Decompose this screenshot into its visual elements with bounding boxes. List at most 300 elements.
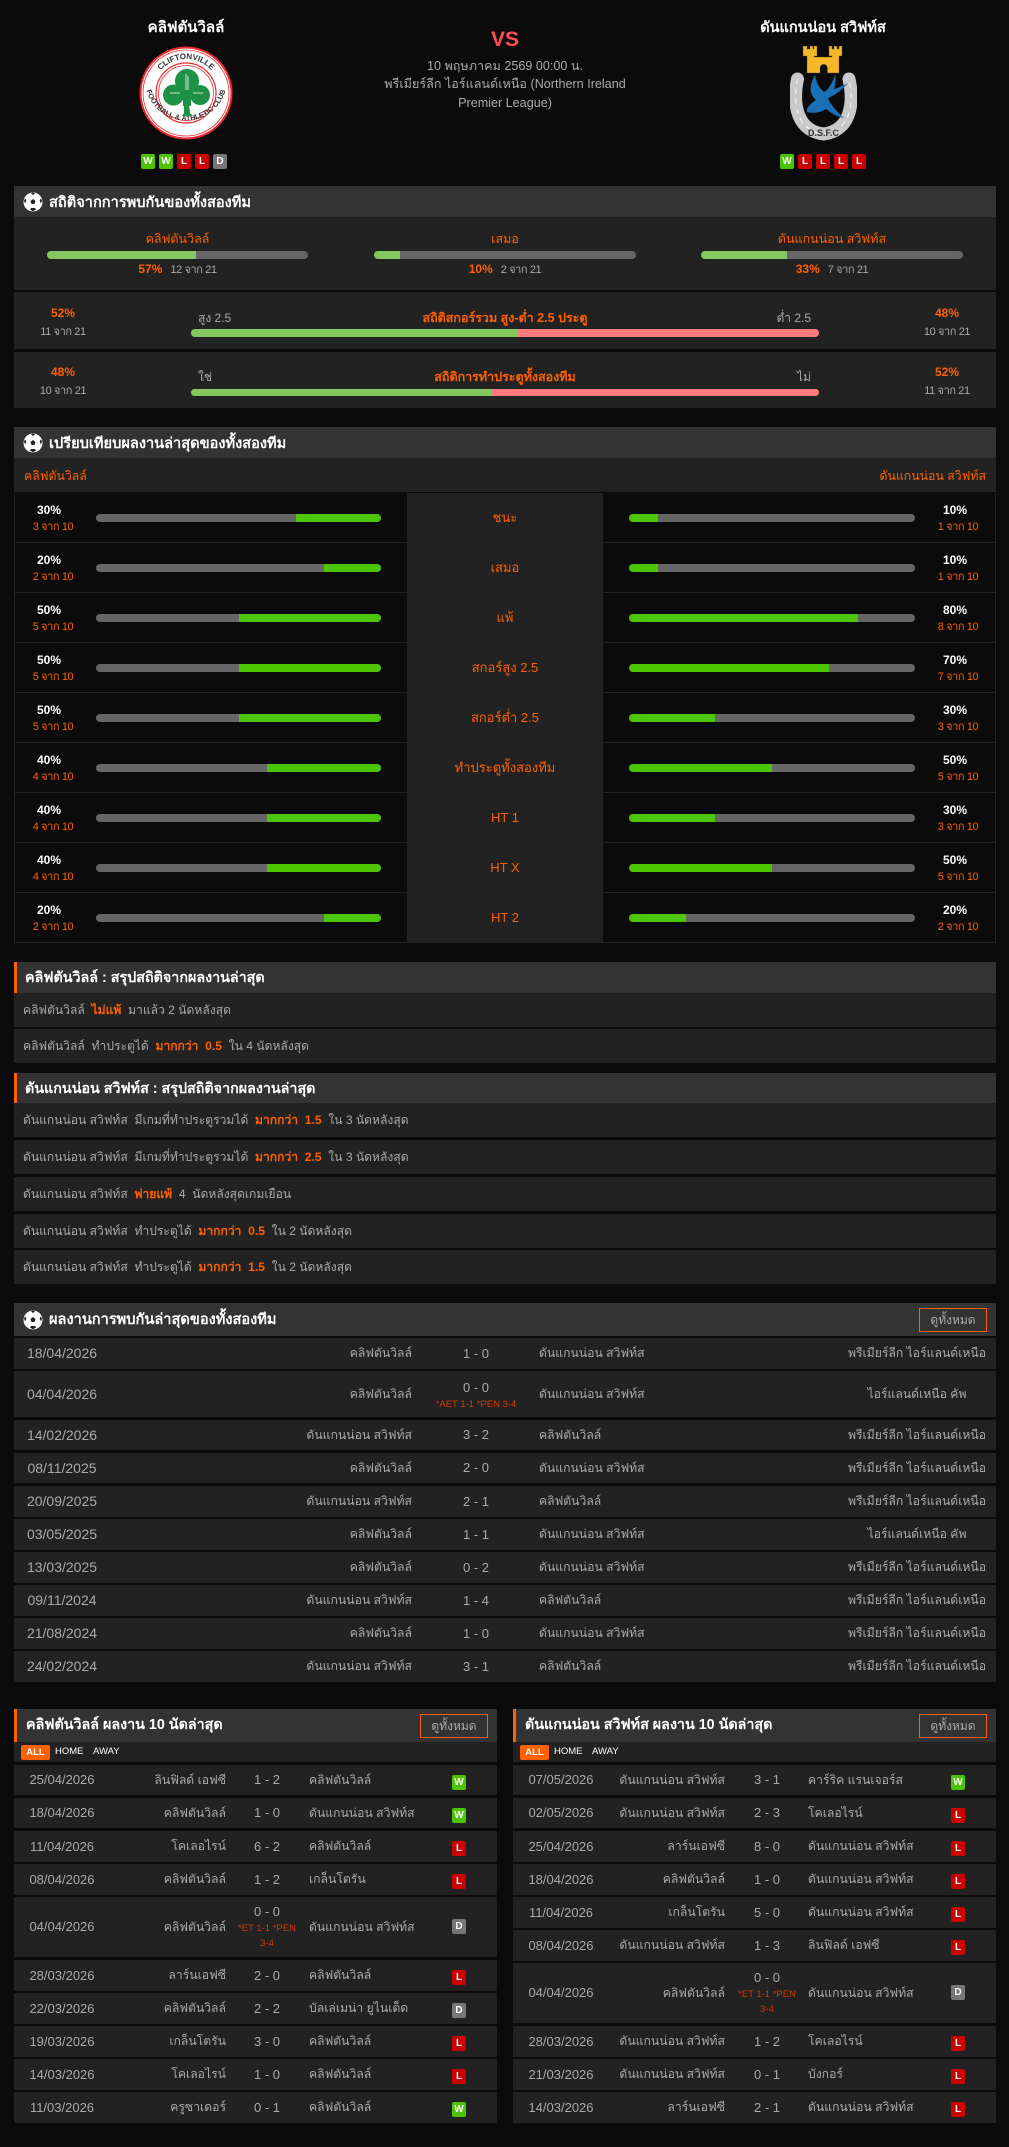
match row — [513, 1930, 996, 1961]
away team logo: Dungannon Swifts crest: D.S.F.C — [808, 128, 839, 138]
match row with penalties: คลิฟตันวิลล์ — [164, 1920, 226, 1934]
match row: คลิฟตันวิลล์ — [350, 1626, 412, 1640]
match row: 09/11/2024 — [27, 1592, 97, 1608]
chart title: สถิติสกอร์รวม สูง-ต่ำ 2.5 ประตู — [422, 311, 588, 325]
row: draws: 1 จาก 10 — [938, 571, 978, 583]
summary line — [14, 1214, 996, 1248]
match row: 0 - 1 — [754, 2067, 780, 2082]
label: over: สูง 2.5 — [198, 311, 231, 325]
match row: ดันแกนน่อน สวิฟท์ส — [619, 2034, 725, 2048]
match row: 1 - 2 — [254, 1872, 280, 1887]
home team label: คลิฟตันวิลล์ — [24, 469, 87, 483]
stat: away wins: 33% 7 จาก 21 — [796, 262, 868, 276]
match row: 25/04/2026 — [29, 1772, 95, 1787]
match row: L — [955, 1909, 961, 1920]
away form badges: L — [856, 156, 862, 167]
split bar — [191, 329, 819, 337]
match row: พรีเมียร์ลีก ไอร์แลนด์เหนือ — [848, 1659, 986, 1673]
row: both teams score: 50% — [943, 753, 967, 767]
match row: L — [955, 1942, 961, 1953]
match row: L — [955, 1810, 961, 1821]
match row: ไอร์แลนด์เหนือ คัพ — [868, 1527, 966, 1541]
match row: 1 - 0 — [254, 1805, 280, 1820]
match row: 1 - 1 — [463, 1527, 489, 1542]
heading: recent form comparison: เปรียบเทียบผลงานล่าสุดของทั้งสองทีม — [49, 436, 286, 452]
match row: 25/04/2026 — [528, 1839, 594, 1854]
match row: 8 - 0 — [754, 1839, 780, 1854]
row: losses: 80% — [943, 603, 967, 617]
match row: L — [955, 2071, 961, 2082]
home form badges: W — [161, 156, 171, 167]
panel: head to head win draw split — [14, 217, 996, 290]
home form badges: L — [181, 156, 187, 167]
match header — [140, 18, 886, 169]
match row: ดันแกนน่อน สวิฟท์ส — [539, 1387, 645, 1401]
team name strip — [14, 458, 996, 492]
row: draws — [14, 543, 996, 593]
match row: คลิฟตันวิลล์ — [539, 1593, 601, 1607]
match row: L — [456, 1843, 462, 1854]
match row: ดันแกนน่อน สวิฟท์ส — [306, 1593, 412, 1607]
match row: พรีเมียร์ลีก ไอร์แลนด์เหนือ — [848, 1346, 986, 1360]
match row: คลิฟตันวิลล์ — [309, 2100, 371, 2114]
match row — [14, 1371, 996, 1417]
stat: away wins: ดันแกนน่อน สวิฟท์ส — [778, 232, 886, 246]
row: both teams score: 40% — [37, 753, 61, 767]
match row with penalties: ดันแกนน่อน สวิฟท์ส — [808, 1986, 914, 2000]
row: wins: ชนะ — [493, 510, 517, 525]
row: HT 2: 20% — [37, 903, 61, 917]
home form badges — [141, 154, 227, 169]
match row — [513, 1831, 996, 1862]
match row: ดันแกนน่อน สวิฟท์ส — [306, 1494, 412, 1508]
match row: ดันแกนน่อน สวิฟท์ส — [808, 1872, 914, 1886]
home form badges: W — [143, 156, 153, 167]
row: HT X: 50% — [943, 853, 967, 867]
match row — [513, 1864, 996, 1895]
match row: 0 - 0 — [463, 1380, 489, 1395]
match row: 04/04/2026 — [27, 1386, 97, 1402]
summary line: คลิฟตันวิลล์ ไม่แพ้ มาแล้ว 2 นัดหลังสุด — [23, 1003, 231, 1017]
stat: home wins: 57% 12 จาก 21 — [138, 262, 217, 276]
match row with penalties: 3-4 — [760, 2004, 774, 2015]
match row: ดันแกนน่อน สวิฟท์ส — [619, 1773, 725, 1787]
row: over 2.5: สกอร์สูง 2.5 — [472, 660, 538, 675]
match row: บัลเล่เมน่า ยูไนเต็ด — [309, 2001, 408, 2015]
match row: 03/05/2025 — [27, 1526, 97, 1542]
away form badges: W — [782, 156, 792, 167]
match row: 13/03/2025 — [27, 1559, 97, 1575]
match row: 20/09/2025 — [27, 1493, 97, 1509]
row: wins: 10% — [943, 503, 967, 517]
match row: 22/03/2026 — [29, 2001, 95, 2016]
match row — [14, 1960, 497, 1991]
match row with penalties: 0 - 0 — [254, 1904, 280, 1919]
match row: คลิฟตันวิลล์ — [350, 1387, 412, 1401]
row: under 2.5: 5 จาก 10 — [33, 721, 73, 733]
button: view all: ดูทั้งหมด — [930, 1313, 976, 1327]
row: both teams score — [14, 743, 996, 793]
match row: W — [454, 1777, 464, 1788]
match row: ลาร์นเอฟซี — [667, 1839, 725, 1853]
match row — [14, 2059, 497, 2090]
filter tabs: ALL — [525, 1747, 544, 1758]
row: HT X: 40% — [37, 853, 61, 867]
button: view all: ดูทั้งหมด — [431, 1719, 477, 1733]
label: no: ไม่ — [797, 370, 811, 384]
match row — [14, 1420, 996, 1450]
row: wins: 30% — [37, 503, 61, 517]
match row: 08/04/2026 — [29, 1872, 95, 1887]
home form badges: D — [216, 156, 224, 167]
row: HT X: HT X — [490, 860, 520, 875]
match row with penalties: ดันแกนน่อน สวิฟท์ส — [309, 1920, 415, 1934]
match row: 14/02/2026 — [27, 1427, 97, 1443]
summary line — [14, 1140, 996, 1174]
row: draws: เสมอ — [491, 560, 519, 575]
away form badges — [780, 154, 866, 169]
panel: away last 10 matches — [513, 1709, 996, 2123]
match row: คลิฟตันวิลล์ — [309, 2034, 371, 2048]
match row: L — [955, 2038, 961, 2049]
row: under 2.5: 30% — [943, 703, 967, 717]
home side percent: 10 จาก 21 — [40, 385, 86, 397]
away form badges: L — [820, 156, 826, 167]
match row: ดันแกนน่อน สวิฟท์ส — [306, 1659, 412, 1673]
match row: คาร์ริค แรนเจอร์ส — [808, 1773, 903, 1787]
icon: soccer ball — [24, 434, 42, 452]
match row: 08/11/2025 — [27, 1460, 97, 1476]
panel: home last 10 matches — [14, 1709, 497, 2123]
match row — [513, 1897, 996, 1928]
row: losses: 8 จาก 10 — [938, 621, 978, 633]
row: HT 1: 3 จาก 10 — [938, 821, 978, 833]
match row: พรีเมียร์ลีก ไอร์แลนด์เหนือ — [848, 1461, 986, 1475]
heading: away recent summary: ดันแกนน่อน สวิฟท์ส : สรุปสถิติจากผลงานล่าสุด — [25, 1081, 315, 1097]
match row: *AET 1-1 *PEN 3-4 — [436, 1399, 516, 1410]
match row: 11/04/2026 — [529, 1905, 593, 1920]
match row — [14, 1552, 996, 1583]
panel heading — [14, 1709, 497, 1742]
row: HT 1: HT 1 — [491, 810, 519, 825]
stat: away wins — [701, 232, 963, 276]
match row: คลิฟตันวิลล์ — [309, 1968, 371, 1982]
match row: 3 - 0 — [254, 2034, 280, 2049]
icon: soccer ball — [24, 192, 42, 212]
match row: ดันแกนน่อน สวิฟท์ส — [619, 2067, 725, 2081]
home side percent: 48% — [51, 365, 75, 379]
row: wins — [14, 493, 996, 543]
summary line: ดันแกนน่อน สวิฟท์ส มีเกมที่ทำประตูรวมได้ มากกว่า 1.5 ใน 3 นัดหลังสุด — [23, 1113, 409, 1127]
match row: L — [456, 1972, 462, 1983]
match row: เกล็นโตรัน — [309, 1872, 366, 1886]
home form badges: L — [199, 156, 205, 167]
stat: draws — [374, 232, 636, 276]
heading: head to head results — [14, 1303, 996, 1336]
match row: ดันแกนน่อน สวิฟท์ส — [539, 1560, 645, 1574]
row: draws: 2 จาก 10 — [33, 571, 73, 583]
match row: เกล็นโตรัน — [169, 2034, 226, 2048]
match row: 1 - 2 — [254, 1772, 280, 1787]
filter tabs — [14, 1742, 497, 1762]
row: HT 2: HT 2 — [491, 910, 519, 925]
heading: head to head stats: สถิติจากการพบกันของทั้งสองทีม — [49, 195, 251, 211]
row: HT 2: 2 จาก 10 — [938, 921, 978, 933]
heading: recent form comparison — [14, 427, 996, 458]
filter tabs: ALL — [26, 1747, 45, 1758]
match row: 08/04/2026 — [528, 1938, 594, 1953]
match row: ดันแกนน่อน สวิฟท์ส — [619, 1938, 725, 1952]
away team logo: Dungannon Swifts crest — [790, 46, 857, 140]
label: under: ต่ำ 2.5 — [776, 311, 811, 325]
row: HT 1 — [14, 793, 996, 843]
match row: 18/04/2026 — [29, 1805, 95, 1820]
match row — [14, 2026, 497, 2057]
summary line — [14, 993, 996, 1027]
match row with penalties: *ET 1-1 *PEN — [738, 1989, 796, 2000]
button: view all — [919, 1308, 987, 1332]
filter tabs — [513, 1742, 996, 1762]
match row: คลิฟตันวิลล์ — [539, 1494, 601, 1508]
match row: ดันแกนน่อน สวิฟท์ส — [539, 1461, 645, 1475]
row: under 2.5: 50% — [37, 703, 61, 717]
away side percent: 10 จาก 21 — [924, 326, 970, 338]
match row: L — [456, 2071, 462, 2082]
match row: 07/05/2026 — [528, 1772, 594, 1787]
match row: พรีเมียร์ลีก ไอร์แลนด์เหนือ — [848, 1428, 986, 1442]
match row — [14, 1486, 996, 1517]
summary line: ดันแกนน่อน สวิฟท์ส พ่ายแพ้ 4 นัดหลังสุดเกมเยือน — [23, 1187, 291, 1201]
match row with penalties: 0 - 0 — [754, 1970, 780, 1985]
versus mark: VS — [491, 28, 519, 51]
row: HT 1: 30% — [943, 803, 967, 817]
row: both teams score: 5 จาก 10 — [938, 771, 978, 783]
stat: home wins: คลิฟตันวิลล์ — [146, 232, 209, 246]
match row: 5 - 0 — [754, 1905, 780, 1920]
match row: 18/04/2026 — [528, 1872, 594, 1887]
match row with penalties: 04/04/2026 — [528, 1985, 594, 2000]
row: over 2.5: 5 จาก 10 — [33, 671, 73, 683]
match row: 3 - 1 — [754, 1772, 780, 1787]
match row: พรีเมียร์ลีก ไอร์แลนด์เหนือ — [848, 1593, 986, 1607]
heading: head to head results: ผลงานการพบกันล่าสุดของทั้งสองทีม — [49, 1312, 277, 1328]
match row: โคเลอไรน์ — [808, 1806, 863, 1820]
row: both teams score: ทำประตูทั้งสองทีม — [455, 760, 555, 775]
filter tabs: HOME — [55, 1746, 84, 1757]
match row — [14, 1519, 996, 1550]
button: view all — [919, 1714, 987, 1738]
away side percent: 11 จาก 21 — [924, 385, 970, 397]
match row: 02/05/2026 — [528, 1805, 594, 1820]
match row: ดันแกนน่อน สวิฟท์ส — [539, 1527, 645, 1541]
match row: 2 - 1 — [754, 2100, 780, 2115]
home side percent — [40, 365, 86, 397]
match row: 1 - 0 — [754, 1872, 780, 1887]
match row: ดันแกนน่อน สวิฟท์ส — [309, 1806, 415, 1820]
away side percent: 52% — [935, 365, 959, 379]
match row: ดันแกนน่อน สวิฟท์ส — [539, 1346, 645, 1360]
match row: บังกอร์ — [808, 2067, 843, 2081]
match row: โคเลอไรน์ — [171, 1839, 226, 1853]
match row: โคเลอไรน์ — [171, 2067, 226, 2081]
match row: W — [454, 1810, 464, 1821]
match row: 2 - 3 — [754, 1805, 780, 1820]
match row: ดันแกนน่อน สวิฟท์ส — [619, 1806, 725, 1820]
row: losses: 5 จาก 10 — [33, 621, 73, 633]
match row: 28/03/2026 — [528, 2034, 594, 2049]
match row — [513, 2026, 996, 2057]
match row: 2 - 1 — [463, 1494, 489, 1509]
home team logo: Cliftonville crest — [140, 46, 232, 140]
panel: both teams to score — [14, 352, 996, 408]
match row: 3 - 2 — [463, 1427, 489, 1442]
row: HT X: 5 จาก 10 — [938, 871, 978, 883]
match row — [513, 1798, 996, 1828]
match row with penalties: D — [954, 1987, 962, 1998]
table: head to head results — [14, 1338, 996, 1682]
row: over 2.5: 7 จาก 10 — [938, 671, 978, 683]
row: draws: 20% — [37, 553, 61, 567]
match row: 28/03/2026 — [29, 1968, 95, 1983]
match row: D — [455, 2005, 463, 2016]
panel heading — [513, 1709, 996, 1742]
match row: 1 - 0 — [254, 2067, 280, 2082]
button: view all: ดูทั้งหมด — [930, 1719, 976, 1733]
match row: 11/03/2026 — [30, 2100, 94, 2115]
match row: คลิฟตันวิลล์ — [164, 2001, 226, 2015]
match row: L — [955, 1843, 961, 1854]
away side percent: 48% — [935, 306, 959, 320]
match row: 18/04/2026 — [27, 1345, 97, 1361]
match row: พรีเมียร์ลีก ไอร์แลนด์เหนือ — [848, 1494, 986, 1508]
split bar — [191, 389, 819, 396]
home side percent: 11 จาก 21 — [40, 326, 86, 338]
match row: โคเลอไรน์ — [808, 2034, 863, 2048]
away form badges: L — [802, 156, 808, 167]
away side percent — [924, 306, 970, 338]
row: under 2.5: 3 จาก 10 — [938, 721, 978, 733]
heading: head to head stats — [14, 186, 996, 217]
summary line — [14, 1250, 996, 1284]
row: draws: 10% — [943, 553, 967, 567]
home side percent — [40, 306, 86, 338]
panel: total goals over under 2.5 — [14, 292, 996, 349]
match row with penalties — [513, 1963, 996, 2023]
match row: 0 - 1 — [254, 2100, 280, 2115]
filter tabs: AWAY — [93, 1746, 120, 1757]
match row — [14, 2092, 497, 2123]
home team logo: Cliftonville crest: FOOTBALL & ATHLETIC CLUB — [146, 89, 225, 121]
row: losses: 50% — [37, 603, 61, 617]
stat: home wins — [47, 232, 308, 276]
stat: draws: 10% 2 จาก 21 — [469, 262, 541, 276]
match row: L — [955, 1876, 961, 1887]
summary line: คลิฟตันวิลล์ ทำประตูได้ มากกว่า 0.5 ใน 4 นัดหลังสุด — [23, 1039, 309, 1053]
match row with penalties: *ET 1-1 *PEN — [238, 1923, 296, 1934]
match row with penalties: D — [455, 1921, 463, 1932]
match date: 10 พฤษภาคม 2569 00:00 น. — [427, 59, 583, 73]
match row — [14, 1618, 996, 1649]
match row: 19/03/2026 — [29, 2034, 95, 2049]
match row: พรีเมียร์ลีก ไอร์แลนด์เหนือ — [848, 1626, 986, 1640]
match row: L — [456, 1876, 462, 1887]
match row: 11/04/2026 — [30, 1839, 94, 1854]
match row: คลิฟตันวิลล์ — [164, 1872, 226, 1886]
summary line: ดันแกนน่อน สวิฟท์ส มีเกมที่ทำประตูรวมได้ มากกว่า 2.5 ใน 3 นัดหลังสุด — [23, 1150, 409, 1164]
match row: L — [456, 2038, 462, 2049]
summary line: ดันแกนน่อน สวิฟท์ส ทำประตูได้ มากกว่า 1.5 ใน 2 นัดหลังสุด — [23, 1260, 352, 1274]
row: wins: 1 จาก 10 — [938, 521, 978, 533]
match row: คลิฟตันวิลล์ — [309, 1839, 371, 1853]
match row: 2 - 0 — [254, 1968, 280, 1983]
summary line — [14, 1029, 996, 1063]
match row: L — [955, 2104, 961, 2115]
match row: พรีเมียร์ลีก ไอร์แลนด์เหนือ — [848, 1560, 986, 1574]
match row: W — [953, 1777, 963, 1788]
panel heading: คลิฟตันวิลล์ ผลงาน 10 นัดล่าสุด — [26, 1717, 223, 1733]
summary line — [14, 1103, 996, 1137]
match row: ดันแกนน่อน สวิฟท์ส — [808, 1839, 914, 1853]
row: HT 1: 4 จาก 10 — [33, 821, 73, 833]
match row — [14, 1453, 996, 1483]
row: HT 2: 2 จาก 10 — [33, 921, 73, 933]
match row — [14, 1585, 996, 1616]
match row: ลินฟิลด์ เอฟซี — [808, 1938, 880, 1952]
match row: 24/02/2024 — [27, 1658, 97, 1674]
match row: 14/03/2026 — [528, 2100, 594, 2115]
match row: 14/03/2026 — [29, 2067, 95, 2082]
row: HT X — [14, 843, 996, 893]
match row: ลินฟิลด์ เอฟซี — [154, 1773, 226, 1787]
match row: 2 - 2 — [254, 2001, 280, 2016]
match row: คลิฟตันวิลล์ — [350, 1461, 412, 1475]
row: HT 1: 40% — [37, 803, 61, 817]
row: losses — [14, 593, 996, 643]
match row: ดันแกนน่อน สวิฟท์ส — [306, 1428, 412, 1442]
league name — [384, 76, 626, 110]
match row: ดันแกนน่อน สวิฟท์ส — [539, 1626, 645, 1640]
match row: คลิฟตันวิลล์ — [350, 1560, 412, 1574]
league name: Premier League) — [458, 96, 552, 110]
match row with penalties — [14, 1897, 497, 1957]
match row: คลิฟตันวิลล์ — [539, 1428, 601, 1442]
match row — [14, 1993, 497, 2024]
stat: draws: เสมอ — [491, 232, 519, 246]
home team logo: Cliftonville crest: CLIFTONVILLE — [158, 54, 215, 70]
row: wins: 3 จาก 10 — [33, 521, 73, 533]
match row: คลิฟตันวิลล์ — [663, 1872, 725, 1886]
match row: ลาร์นเอฟซี — [168, 1968, 226, 1982]
match row: เกล็นโตรัน — [668, 1905, 725, 1919]
match row: คลิฟตันวิลล์ — [309, 2067, 371, 2081]
match row: ไอร์แลนด์เหนือ คัพ — [868, 1387, 966, 1401]
match row: คลิฟตันวิลล์ — [350, 1527, 412, 1541]
match row: คลิฟตันวิลล์ — [164, 1806, 226, 1820]
panel heading: ดันแกนน่อน สวิฟท์ส ผลงาน 10 นัดล่าสุด — [525, 1717, 772, 1733]
row: under 2.5 — [14, 693, 996, 743]
match row — [14, 1651, 996, 1682]
filter tabs: AWAY — [592, 1746, 619, 1757]
row: HT X: 4 จาก 10 — [33, 871, 73, 883]
match row: 1 - 0 — [463, 1346, 489, 1361]
match row — [14, 1765, 497, 1795]
home side percent: 52% — [51, 306, 75, 320]
match row — [14, 1798, 497, 1828]
match row — [513, 2092, 996, 2123]
match row: 3 - 1 — [463, 1659, 489, 1674]
row: losses: แพ้ — [497, 610, 513, 625]
match row: 1 - 0 — [463, 1626, 489, 1641]
